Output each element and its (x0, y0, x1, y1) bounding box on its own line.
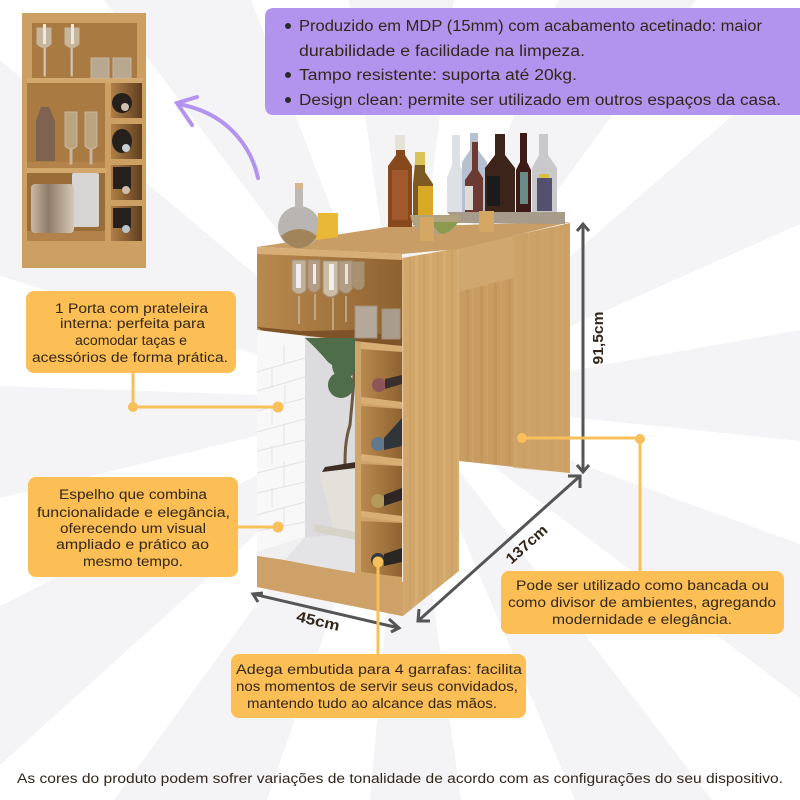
tray (447, 212, 565, 224)
clear bottle (447, 135, 465, 212)
callout: mirror: mesmo tempo. (83, 554, 183, 569)
callout: use as counter or divider: modernidade e elegância. (552, 612, 732, 627)
feature list: Tampo resistente: suporta até 20kg. (299, 67, 577, 84)
yellow napkin box (316, 213, 338, 240)
bowl and shot glasses (410, 215, 460, 234)
plant in pot (305, 338, 356, 540)
feature list: durabilidade e facilidade na limpeza. (299, 43, 585, 60)
wine rack (355, 342, 402, 582)
blue bottle (462, 133, 487, 212)
callout: built-in wine rack (231, 654, 526, 718)
feature list (285, 18, 781, 109)
callout: mirror: oferecendo um visual (60, 521, 206, 536)
product: bar counter (257, 222, 570, 616)
dimension: height 91,5cm (577, 224, 607, 472)
mirror compartment (257, 330, 356, 574)
wine bottles (112, 93, 132, 228)
dimension: depth 137cm: 137cm (503, 522, 551, 568)
dark bottle (485, 134, 515, 212)
callout: built-in wine rack: mantendo tudo ao alcance das mãos. (247, 696, 497, 711)
cocktail shaker (36, 107, 55, 161)
callout: use as counter or divider (501, 571, 784, 634)
jar of corks (278, 183, 320, 248)
dimension: height 91,5cm: 91,5cm (590, 312, 607, 364)
tabletop bottles (278, 133, 565, 248)
bottles in rack (371, 375, 402, 567)
dimension: width 45cm: 45cm (295, 608, 341, 635)
connector lines (133, 373, 640, 654)
feature list: Design clean: permite ser utilizado em outros espaços da casa. (299, 92, 781, 109)
callout: door with shelf: acessórios de forma prática. (32, 350, 228, 365)
glasses (292, 260, 400, 339)
callout: mirror: Espelho que combina (59, 487, 208, 502)
callout: mirror: ampliado e prático ao (56, 537, 209, 552)
dimension: depth 137cm (418, 476, 580, 621)
dimension: width 45cm (253, 593, 399, 635)
feature list: Produzido em MDP (15mm) com acabamento acetinado: maior (299, 18, 762, 35)
textured bottle (532, 134, 557, 212)
footer note: As cores do produto podem sofrer variações de tonalidade de acordo com as configurações do seu dispositivo. (17, 771, 783, 786)
connector dots (128, 402, 645, 568)
panel: product features (265, 8, 800, 115)
front face (257, 253, 402, 616)
callout: use as counter or divider: como divisor de ambientes, agregando (508, 595, 776, 610)
callout: door with shelf: acomodar taças e (75, 333, 187, 348)
wine glasses (37, 24, 131, 164)
callout: door with shelf: interna: perfeita para (60, 316, 206, 331)
front side panel (402, 248, 459, 616)
callout: built-in wine rack: Adega embutida para 4 garrafas: facilita (236, 662, 523, 677)
callout: door with shelf: 1 Porta com prateleira (55, 301, 209, 316)
callout: built-in wine rack: nos momentos de servir seus convidados, (236, 679, 518, 694)
top shelf niche (257, 254, 402, 353)
whisky bottle (388, 135, 412, 227)
counter top (257, 222, 570, 254)
rear panel (459, 223, 570, 473)
red bottle (516, 133, 531, 212)
callout: use as counter or divider: Pode ser utilizado como bancada ou (516, 578, 769, 593)
yellow bottle (413, 152, 433, 225)
ice bucket and jug (72, 173, 99, 227)
arrow: to inset photo (177, 97, 258, 178)
counter base (257, 556, 403, 616)
callout: mirror (28, 477, 238, 577)
callout: door with shelf (26, 291, 236, 373)
callout: mirror: funcionalidade e elegância, (37, 505, 230, 520)
inset photo: cabinet interior (22, 13, 146, 268)
